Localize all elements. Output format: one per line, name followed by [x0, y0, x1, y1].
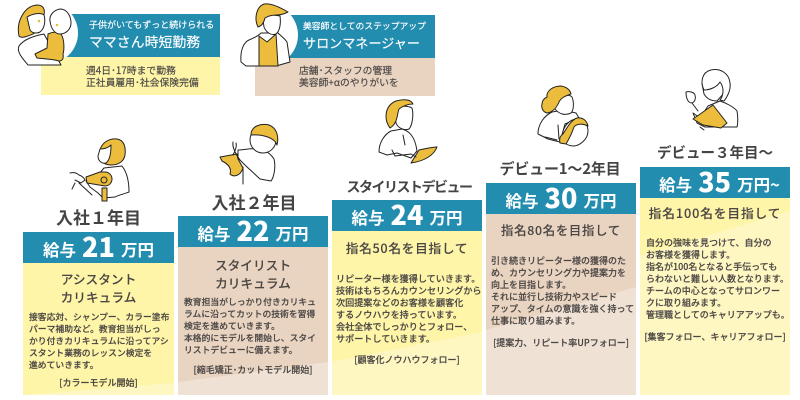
column 5: debut 3 years	[640, 69, 790, 395]
description: らわないと難しい人数となります。	[646, 272, 789, 285]
description: するノウハウを持っています。	[336, 307, 462, 321]
panel body	[178, 247, 328, 395]
skill tag: [集客フォロー、キャリアフォロー]	[644, 330, 786, 343]
panel body	[640, 198, 790, 395]
card body: 店舗･スタッフの管理	[299, 63, 392, 77]
level heading: 入社２年目	[212, 189, 296, 214]
description: リストデビューに備えます。	[184, 343, 297, 356]
goal title: 指名80名を目指して	[501, 221, 621, 239]
salary bar: 給与24 万円	[352, 194, 462, 233]
salary bar: 給与22 万円	[198, 210, 308, 249]
column 1: first year	[23, 138, 174, 395]
level heading: 入社１年目	[56, 204, 141, 229]
description: チームの中心となってサロンワー	[646, 284, 780, 297]
column 3: stylist debut	[332, 99, 482, 395]
level heading: スタイリストデビュー	[346, 177, 472, 197]
description: 引き続きリピーター様の獲得のた	[491, 254, 626, 267]
icon: mother holding child	[18, 4, 78, 66]
description: 検定を進めていきます。	[184, 319, 280, 332]
icon: manager with document	[686, 69, 738, 130]
description	[29, 310, 169, 371]
description: め、カウンセリング力や提案力を	[491, 266, 626, 279]
description: 進めていきます。	[29, 358, 98, 371]
salary bar	[23, 232, 174, 263]
level heading: デビュー1～2年目	[500, 158, 620, 179]
icon: stylist with clipboard	[378, 99, 438, 164]
description	[184, 295, 316, 356]
card header	[41, 14, 220, 57]
goal title: 指名100名を目指して	[649, 203, 781, 222]
skill tag: [提案力、リピート率UPフォロー]	[493, 336, 629, 349]
salary bar	[178, 216, 328, 247]
skill tag: [縮毛矯正･カットモデル開始]	[194, 363, 312, 376]
card body: 正社員雇用･社会保険完備	[86, 75, 199, 89]
card body	[41, 57, 220, 95]
icon: male manager	[240, 3, 298, 66]
description: 次回提案などのお客様を顧客化	[336, 295, 463, 309]
description: お客様を獲得します。	[646, 248, 735, 261]
icon: stylist and client	[538, 86, 588, 146]
skill tag: [カラーモデル開始]	[59, 376, 138, 389]
description: かり付きカリキュラムに沿ってアシ	[29, 334, 169, 347]
salary bar: 給与21 万円	[43, 226, 154, 265]
description	[336, 271, 482, 345]
level heading: デビュー３年目～	[657, 142, 773, 163]
description: 会社全体でしっかりとフォロー、	[336, 319, 472, 333]
description: 接客応対、シャンプー、カラー塗布	[29, 310, 169, 323]
career card: mother short hours	[41, 14, 220, 95]
curriculum title: カリキュラム	[215, 273, 291, 292]
description: クに取り組みます。	[646, 296, 726, 309]
description: 自分の強味を見つけて、自分の	[646, 236, 772, 249]
description: 向上を目指します。	[491, 278, 571, 291]
description: 仕事に取り組みます。	[491, 314, 580, 327]
description: それに並行し技術力やスピード	[491, 290, 617, 303]
card header: サロンマネージャー	[303, 33, 420, 52]
column 4: debut 1-2 years	[486, 86, 636, 395]
skill tag: [顧客化ノウハウフォロー]	[354, 353, 460, 366]
description	[646, 236, 790, 321]
salary bar	[640, 167, 790, 198]
card body	[255, 58, 435, 96]
card body: 美容師+αのやりがいを	[299, 75, 399, 89]
description: サポートしていきます。	[336, 331, 435, 345]
panel body	[332, 231, 482, 395]
description: 管理職としてのキャリアアップも。	[646, 308, 790, 321]
icon: assistant with dryer	[70, 138, 130, 202]
card header: 美容師としてのステップアップ	[303, 18, 426, 32]
curriculum title	[61, 269, 136, 306]
description: パーマ補助など。教育担当がしっ	[29, 322, 161, 335]
curriculum title	[215, 255, 291, 292]
panel body	[23, 263, 174, 395]
description: 本格的にモデルを開始し、スタイ	[184, 331, 316, 344]
curriculum title: スタイリスト	[215, 255, 291, 274]
career card: salon manager	[255, 15, 435, 96]
description: スタント業務のレッスン検定を	[29, 346, 152, 359]
salary bar: 給与30 万円	[506, 177, 616, 216]
description: 指名が100名となると手伝っても	[646, 260, 777, 273]
card body: 週4日･17時まで勤務	[86, 63, 176, 77]
description	[491, 254, 634, 327]
description: 技術はもちろんカウンセリングから	[336, 283, 482, 297]
card header: 子供がいてもずっと続けられる	[89, 18, 214, 30]
salary bar: 給与35 万円~	[659, 161, 780, 200]
icon: stylist cutting hair	[220, 124, 278, 184]
column 2: second year	[178, 124, 328, 395]
description: リピーター様を獲得していきます。	[336, 271, 480, 285]
card header: ママさん時短勤務	[89, 32, 200, 52]
description: 教育担当がしっかり付きカリキュ	[184, 295, 316, 308]
goal title: 指名50名を目指して	[346, 238, 468, 257]
curriculum title: アシスタント	[61, 269, 136, 288]
panel body	[486, 214, 636, 395]
description: ラムに沿ってカットの技術を習得	[184, 307, 315, 320]
curriculum title: カリキュラム	[61, 287, 136, 306]
salary bar	[486, 183, 636, 214]
salary bar	[332, 200, 482, 231]
description: アップ、タイムの意識を強く持って	[491, 302, 634, 315]
card header	[255, 15, 435, 58]
